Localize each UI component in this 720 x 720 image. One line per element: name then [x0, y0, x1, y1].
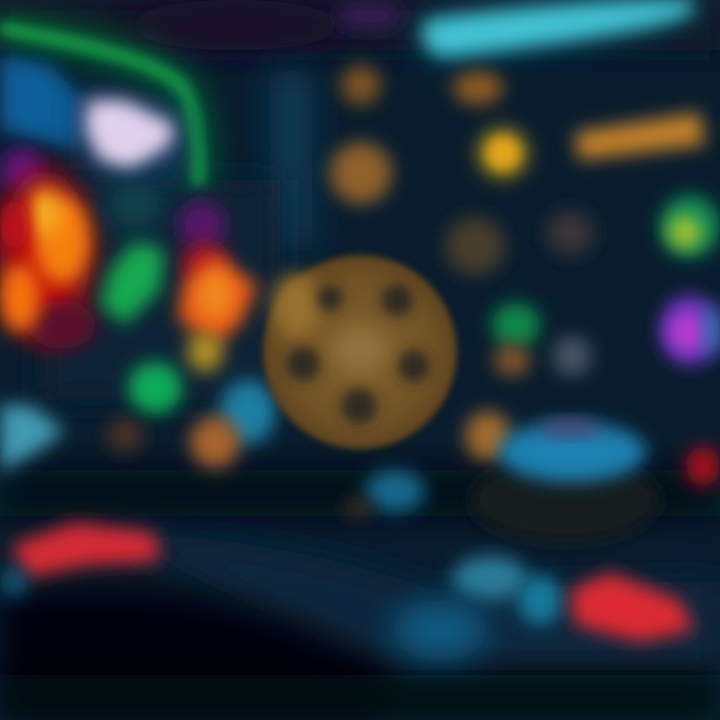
brown circle top: [330, 142, 392, 204]
cyan light bar: [424, 0, 695, 55]
white lilac blob: [85, 100, 175, 170]
grey small circle: [553, 336, 591, 376]
teal patch: [109, 183, 161, 227]
blue small blob: [365, 470, 425, 512]
cookie: [263, 255, 457, 449]
red bar left: [12, 522, 160, 578]
blue blob left of red: [0, 568, 28, 596]
orange circle: [190, 416, 240, 468]
orange circle lower: [465, 411, 511, 461]
brown small blob: [344, 498, 372, 518]
light blue blob left: [0, 405, 65, 472]
blue panel top left: [0, 55, 85, 150]
flame blob centre left: [178, 201, 258, 372]
cookie chips: [286, 284, 430, 424]
green blob: [100, 240, 165, 325]
red blob right: [686, 446, 720, 486]
small orange pill: [453, 71, 503, 105]
navy panel behind lilac blob: [80, 90, 185, 180]
grey brown tiles: [445, 211, 594, 275]
brown circle: [107, 418, 143, 452]
green and orange stack: [492, 303, 540, 376]
colourful flame chart left: [0, 148, 96, 349]
bowl: [470, 420, 660, 542]
orange bar: [575, 112, 705, 160]
blue blobs lower: [392, 556, 562, 660]
yellow circle: [476, 126, 530, 180]
teal blue blob: [220, 380, 276, 444]
green yellow circle: [660, 195, 720, 257]
green circle: [128, 362, 182, 414]
small orange circle: [341, 65, 381, 105]
red bar right: [570, 572, 695, 642]
green arc frame: [0, 28, 198, 185]
purple circle: [660, 295, 720, 365]
